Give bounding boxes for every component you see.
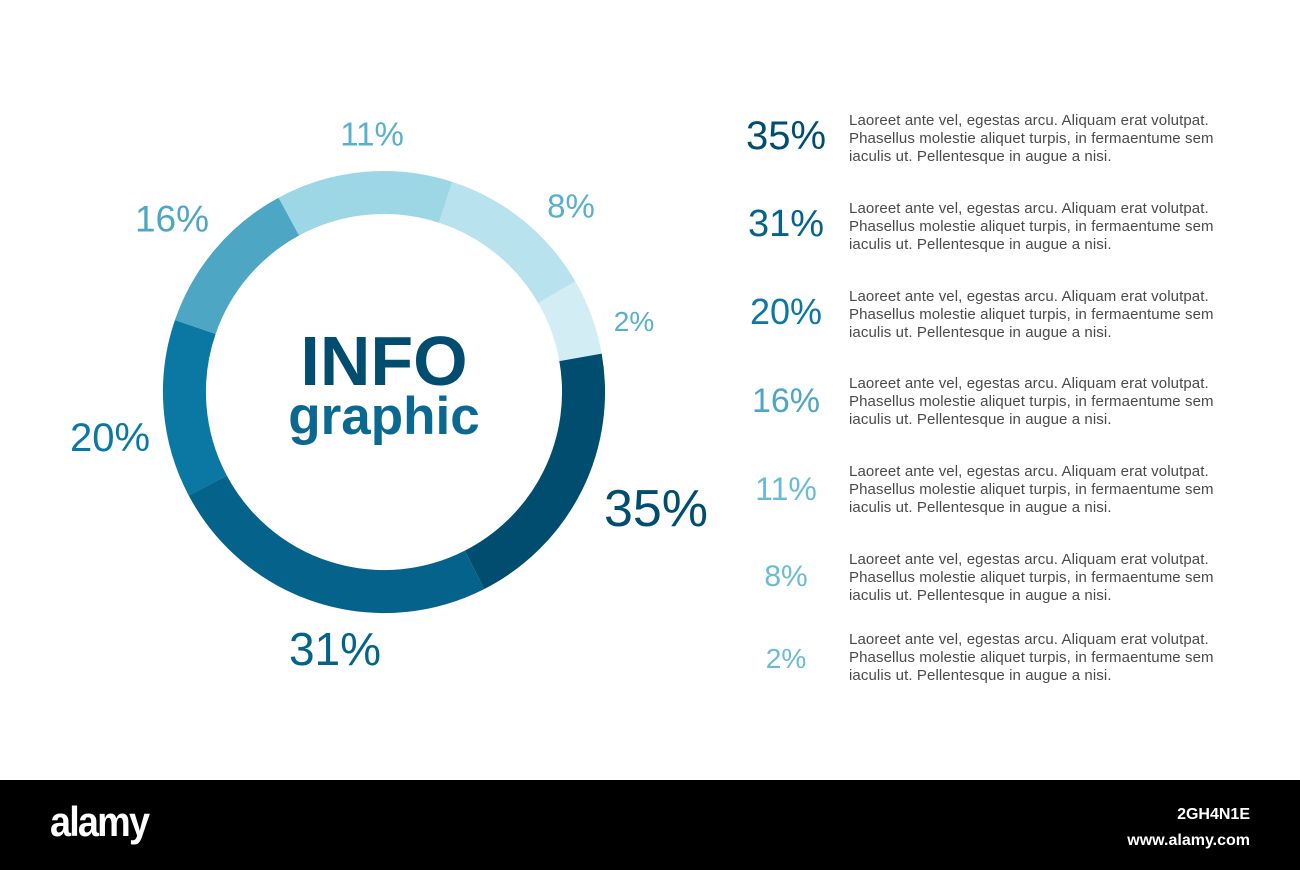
legend list: iaculis ut. Pellentesque in augue a nisi. xyxy=(849,411,1112,428)
legend list: Phasellus molestie aliquet turpis, in fermaentume sem xyxy=(849,481,1214,498)
legend list: Phasellus molestie aliquet turpis, in fermaentume sem xyxy=(849,218,1214,235)
legend list: 11% xyxy=(755,471,817,507)
legend list: Laoreet ante vel, egestas arcu. Aliquam erat volutpat. xyxy=(849,375,1209,392)
legend list: 31% xyxy=(748,203,824,245)
label 2%: 2% xyxy=(614,306,654,337)
center title: INFO xyxy=(300,322,468,400)
legend list: Laoreet ante vel, egestas arcu. Aliquam erat volutpat. xyxy=(849,551,1209,568)
legend list: 8% xyxy=(764,560,808,593)
legend list: 16% xyxy=(752,382,820,420)
label 16%: 16% xyxy=(135,198,209,240)
legend list: Laoreet ante vel, egestas arcu. Aliquam erat volutpat. xyxy=(849,288,1209,305)
segment 20% xyxy=(184,327,208,486)
row 16% xyxy=(752,375,1214,428)
center title xyxy=(288,322,480,446)
legend list: Phasellus molestie aliquet turpis, in fermaentume sem xyxy=(849,130,1214,147)
row 35% xyxy=(746,112,1214,165)
footer logo: alamy xyxy=(50,798,148,845)
legend list xyxy=(746,112,1214,684)
label 8%: 8% xyxy=(547,188,595,224)
row 8% xyxy=(764,551,1214,604)
legend list: iaculis ut. Pellentesque in augue a nisi. xyxy=(849,667,1112,684)
legend list: Phasellus molestie aliquet turpis, in fermaentume sem xyxy=(849,393,1214,410)
legend list: 35% xyxy=(746,114,826,158)
segment 31% xyxy=(208,486,475,592)
label 20%: 20% xyxy=(70,416,150,460)
legend list: Laoreet ante vel, egestas arcu. Aliquam erat volutpat. xyxy=(849,631,1209,648)
segment 2% xyxy=(557,292,580,357)
legend list: iaculis ut. Pellentesque in augue a nisi. xyxy=(849,324,1112,341)
legend list: iaculis ut. Pellentesque in augue a nisi. xyxy=(849,587,1112,604)
center title: graphic xyxy=(288,387,480,446)
label 35%: 35% xyxy=(604,480,708,538)
donut chart xyxy=(162,171,606,614)
legend list: Laoreet ante vel, egestas arcu. Aliquam erat volutpat. xyxy=(849,200,1209,217)
row 2% xyxy=(766,631,1214,684)
segment 8% xyxy=(446,202,557,292)
legend list: iaculis ut. Pellentesque in augue a nisi. xyxy=(849,236,1112,253)
footer id: www.alamy.com xyxy=(1127,832,1250,849)
row 11% xyxy=(755,463,1214,516)
segment 11% xyxy=(289,193,446,217)
row 31% xyxy=(748,200,1214,253)
legend list: iaculis ut. Pellentesque in augue a nisi. xyxy=(849,148,1112,165)
legend list: Phasellus molestie aliquet turpis, in fermaentume sem xyxy=(849,306,1214,323)
label 31%: 31% xyxy=(289,623,381,675)
row 20% xyxy=(750,288,1214,341)
legend list: 20% xyxy=(750,291,822,332)
legend list: iaculis ut. Pellentesque in augue a nisi. xyxy=(849,499,1112,516)
segment 35% xyxy=(475,357,584,570)
legend list: Laoreet ante vel, egestas arcu. Aliquam erat volutpat. xyxy=(849,112,1209,129)
segment 16% xyxy=(195,217,289,327)
footer id: 2GH4N1E xyxy=(1177,806,1250,823)
footer bar xyxy=(0,780,1300,870)
legend list: Laoreet ante vel, egestas arcu. Aliquam erat volutpat. xyxy=(849,463,1209,480)
label 11%: 11% xyxy=(340,116,404,152)
legend list: 2% xyxy=(766,643,806,674)
legend list: Phasellus molestie aliquet turpis, in fermaentume sem xyxy=(849,569,1214,586)
footer id xyxy=(1127,806,1250,849)
legend list: Phasellus molestie aliquet turpis, in fermaentume sem xyxy=(849,649,1214,666)
